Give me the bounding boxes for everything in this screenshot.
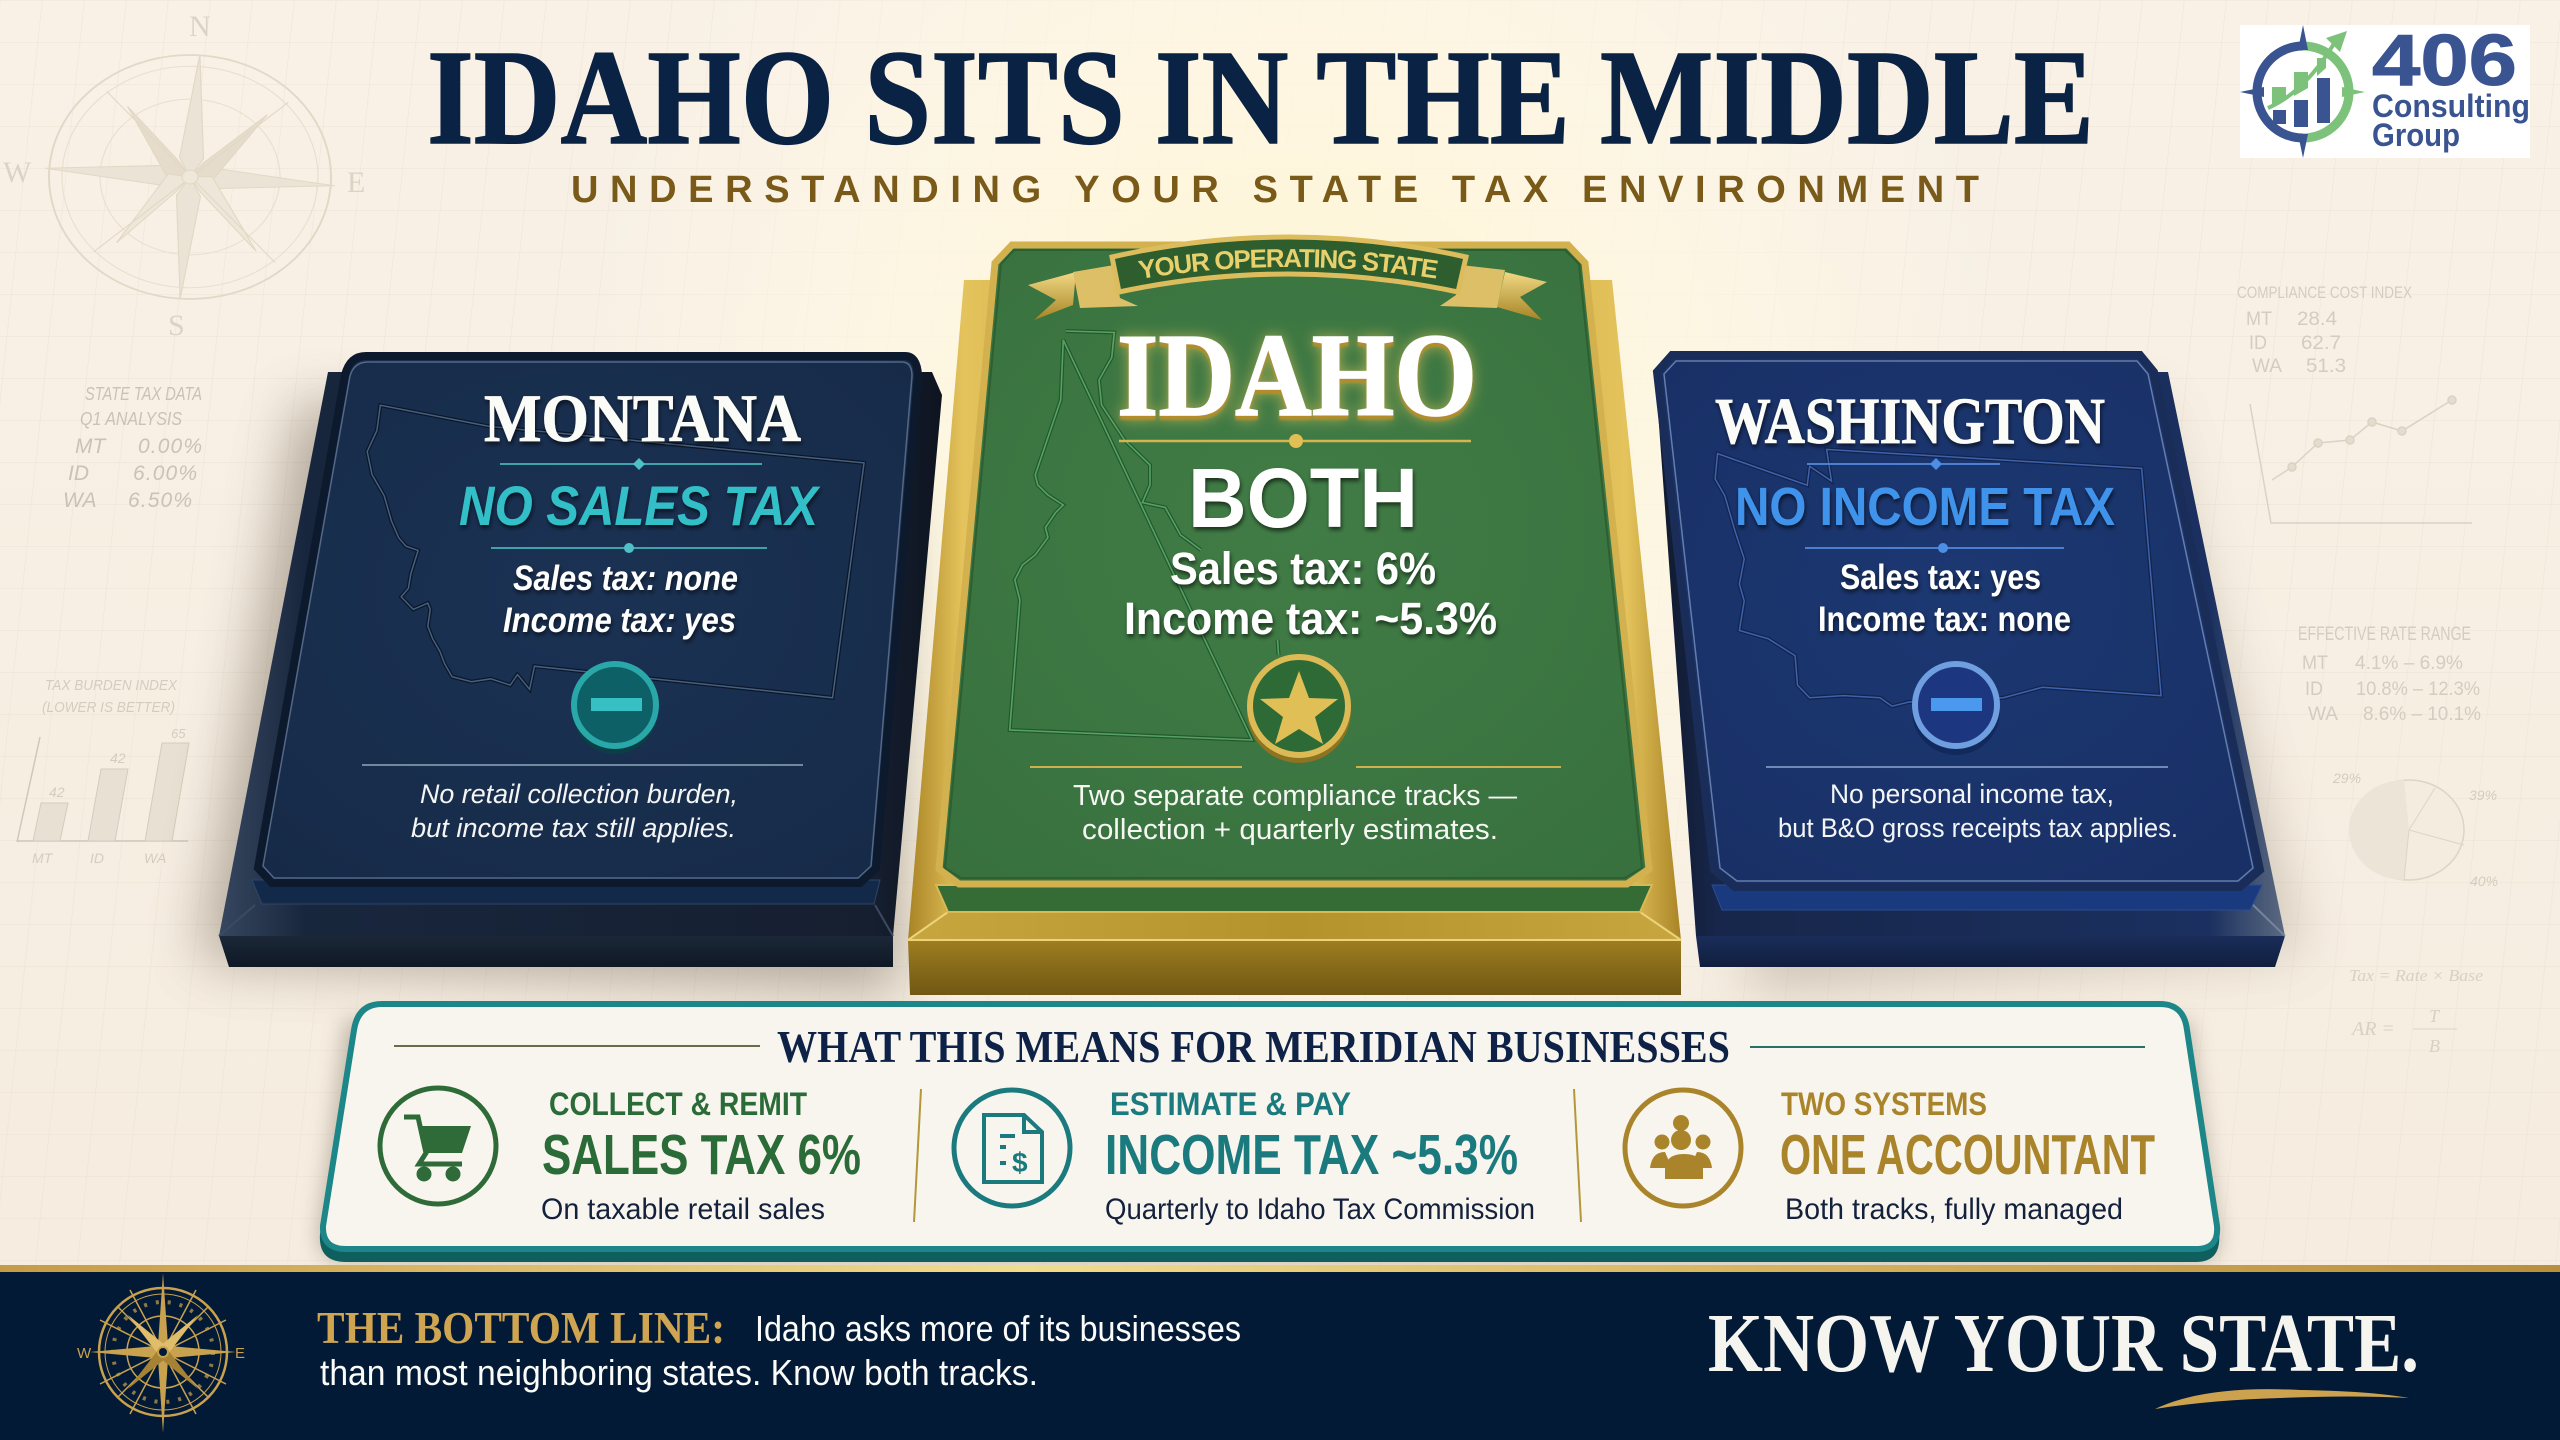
Montana tax facts: Income tax: yes — [503, 601, 736, 640]
left background notes: state tax data: ID — [68, 462, 89, 485]
Montana caption: No retail collection burden, — [420, 779, 738, 809]
right background notes: effective rate range: EFFECTIVE RATE RANGE — [2298, 624, 2471, 645]
footer band — [0, 1265, 2560, 1440]
right background notes: compliance cost index — [2237, 283, 2412, 377]
logo: 406 Consulting Group: Consulting — [2372, 88, 2530, 124]
right background pie chart — [2332, 770, 2498, 889]
item: estimate and pay: ESTIMATE & PAY — [1110, 1086, 1351, 1122]
left background chart: tax burden index: (LOWER IS BETTER) — [42, 699, 175, 716]
background formulas: T — [2429, 1006, 2441, 1026]
icon: tax document: $ — [1012, 1147, 1028, 1178]
right background notes: compliance cost index: ID — [2249, 333, 2267, 354]
left background chart: tax burden index: 42 — [110, 750, 126, 766]
panel heading: WHAT THIS MEANS FOR MERIDIAN BUSINESSES — [777, 1021, 1730, 1072]
compass letters: N — [189, 10, 211, 43]
Washington tax facts: Income tax: none — [1818, 600, 2071, 639]
compass letters: E — [347, 166, 365, 199]
right background notes: compliance cost index: MT — [2246, 309, 2272, 330]
right background notes: effective rate range: 4.1% – 6.9% — [2355, 653, 2463, 674]
item: collect and remit: SALES TAX 6% — [542, 1123, 861, 1187]
item: collect and remit: On taxable retail sales — [541, 1193, 825, 1226]
item: estimate and pay — [1105, 1086, 1535, 1226]
Washington status: no income tax: NO INCOME TAX — [1735, 477, 2115, 537]
Washington caption — [1778, 779, 2178, 843]
ribbon banner — [1028, 234, 1547, 320]
item: two systems one accountant: TWO SYSTEMS — [1781, 1086, 1987, 1122]
right background notes: effective rate range: 8.6% – 10.1% — [2363, 704, 2481, 725]
right background notes: effective rate range — [2298, 624, 2481, 725]
Idaho tax facts — [1124, 543, 1497, 644]
Idaho heading: IDAHO — [1117, 309, 1477, 441]
right background notes: compliance cost index: 51.3 — [2306, 356, 2346, 377]
left background notes: state tax data: 0.00% — [138, 435, 202, 458]
right background notes: effective rate range: ID — [2305, 679, 2323, 700]
left background chart: tax burden index: 65 — [171, 726, 186, 741]
icon: gold compass: W — [77, 1345, 92, 1362]
background formulas — [2349, 966, 2483, 1056]
left background notes: state tax data: MT — [75, 435, 107, 458]
ribbon banner: YOUR OPERATING STATE — [1138, 249, 1438, 278]
item: two systems one accountant — [1780, 1086, 2155, 1226]
left background chart: tax burden index: TAX BURDEN INDEX — [45, 677, 178, 694]
item: collect and remit — [541, 1086, 861, 1226]
left background notes: state tax data: 6.50% — [128, 489, 192, 512]
Washington caption: but B&O gross receipts tax applies. — [1778, 813, 2178, 843]
background formulas: Tax = Rate × Base — [2349, 966, 2483, 985]
logo: 406 Consulting Group — [2240, 21, 2530, 158]
Montana state outline — [367, 405, 864, 698]
ribbon text — [1140, 267, 1438, 279]
background formulas: AR = — [2350, 1018, 2395, 1040]
title: IDAHO SITS IN THE MIDDLE — [427, 23, 2094, 173]
icon: gold compass: E — [235, 1345, 245, 1362]
Montana caption — [411, 779, 738, 843]
Idaho status: both: BOTH — [1188, 451, 1418, 545]
icon: people — [1625, 1090, 1741, 1206]
Idaho state outline — [1010, 331, 1279, 740]
right background notes: compliance cost index: 28.4 — [2297, 309, 2337, 330]
bottom line text: than most neighboring states. Know both tracks. — [320, 1352, 1038, 1393]
right background pie chart: 29% — [2332, 770, 2361, 786]
left background notes: state tax data: Q1 ANALYSIS — [80, 409, 182, 429]
Montana tax facts: Sales tax: none — [513, 559, 738, 598]
Idaho caption: collection + quarterly estimates. — [1082, 814, 1498, 846]
logo: 406 Consulting Group: 406 — [2372, 21, 2517, 101]
right background notes: compliance cost index: COMPLIANCE COST INDEX — [2237, 283, 2412, 302]
Montana caption: but income tax still applies. — [411, 813, 736, 843]
panel: Washington plaque — [1655, 355, 2300, 990]
left background notes: state tax data: STATE TAX DATA — [85, 384, 202, 404]
left background chart: tax burden index: WA — [144, 850, 166, 866]
item: two systems one accountant: Both tracks, fully managed — [1785, 1193, 2123, 1226]
left background chart: tax burden index: MT — [32, 850, 54, 866]
right background notes: effective rate range: MT — [2302, 653, 2328, 674]
background compass rose — [36, 46, 345, 307]
Idaho tax facts: Income tax: ~5.3% — [1124, 593, 1497, 644]
item: collect and remit: COLLECT & REMIT — [549, 1086, 807, 1122]
left background chart: tax burden index: ID — [90, 850, 104, 866]
icon: gold compass — [77, 1273, 245, 1433]
right background notes: compliance cost index: 62.7 — [2301, 333, 2341, 354]
right background pie chart: 40% — [2470, 873, 2498, 889]
bottom line text — [317, 1303, 1241, 1393]
item: estimate and pay: INCOME TAX ~5.3% — [1105, 1123, 1518, 1187]
Washington tax facts: Sales tax: yes — [1840, 558, 2041, 597]
panel: Montana plaque — [200, 356, 942, 990]
compass letters: W — [3, 156, 32, 189]
right background notes: effective rate range: 10.8% – 12.3% — [2356, 679, 2480, 700]
Montana heading: MONTANA — [484, 380, 801, 456]
Montana status: no sales tax: NO SALES TAX — [459, 474, 821, 537]
left background chart: tax burden index: 42 — [49, 784, 65, 800]
icon: teal minus — [572, 664, 658, 754]
right background line chart — [2250, 396, 2472, 523]
logo: 406 Consulting Group: Group — [2372, 117, 2460, 153]
Idaho caption — [1073, 780, 1517, 846]
Montana tax facts — [503, 559, 738, 640]
item: two systems one accountant: ONE ACCOUNTANT — [1780, 1123, 2155, 1187]
Washington tax facts — [1818, 558, 2071, 639]
Idaho tax facts: Sales tax: 6% — [1170, 543, 1436, 594]
bottom line text: Idaho asks more of its businesses — [755, 1308, 1241, 1349]
left background notes: state tax data — [63, 384, 202, 512]
right background notes: effective rate range: WA — [2308, 704, 2338, 725]
icon: gold star — [1247, 657, 1351, 763]
right background notes: compliance cost index: WA — [2252, 356, 2282, 377]
gold swoosh — [2155, 1389, 2409, 1409]
Washington state outline — [1715, 449, 2161, 706]
panel: Idaho plaque — [908, 234, 1682, 995]
panel: what this means for Meridian businesses — [318, 1004, 2219, 1262]
Washington heading: WASHINGTON — [1715, 385, 2105, 458]
compass letters: S — [168, 309, 185, 342]
icon: blue minus — [1912, 664, 2000, 755]
item: estimate and pay: Quarterly to Idaho Tax Commission — [1105, 1193, 1535, 1226]
left background notes: state tax data: WA — [63, 489, 96, 512]
compass letters — [3, 10, 365, 342]
subtitle: UNDERSTANDING YOUR STATE TAX ENVIRONMENT — [571, 169, 1979, 211]
right background pie chart: 39% — [2469, 787, 2497, 803]
icon: shopping cart — [380, 1088, 496, 1204]
background formulas: B — [2429, 1036, 2440, 1056]
left background notes: state tax data: 6.00% — [133, 462, 197, 485]
left background chart: tax burden index — [17, 677, 189, 866]
Washington caption: No personal income tax, — [1830, 779, 2114, 809]
know your state callout: KNOW YOUR STATE. — [1708, 1297, 2419, 1390]
Idaho caption: Two separate compliance tracks — — [1073, 780, 1517, 812]
icon: tax document — [954, 1090, 1070, 1206]
bottom line text: THE BOTTOM LINE: — [317, 1303, 725, 1353]
